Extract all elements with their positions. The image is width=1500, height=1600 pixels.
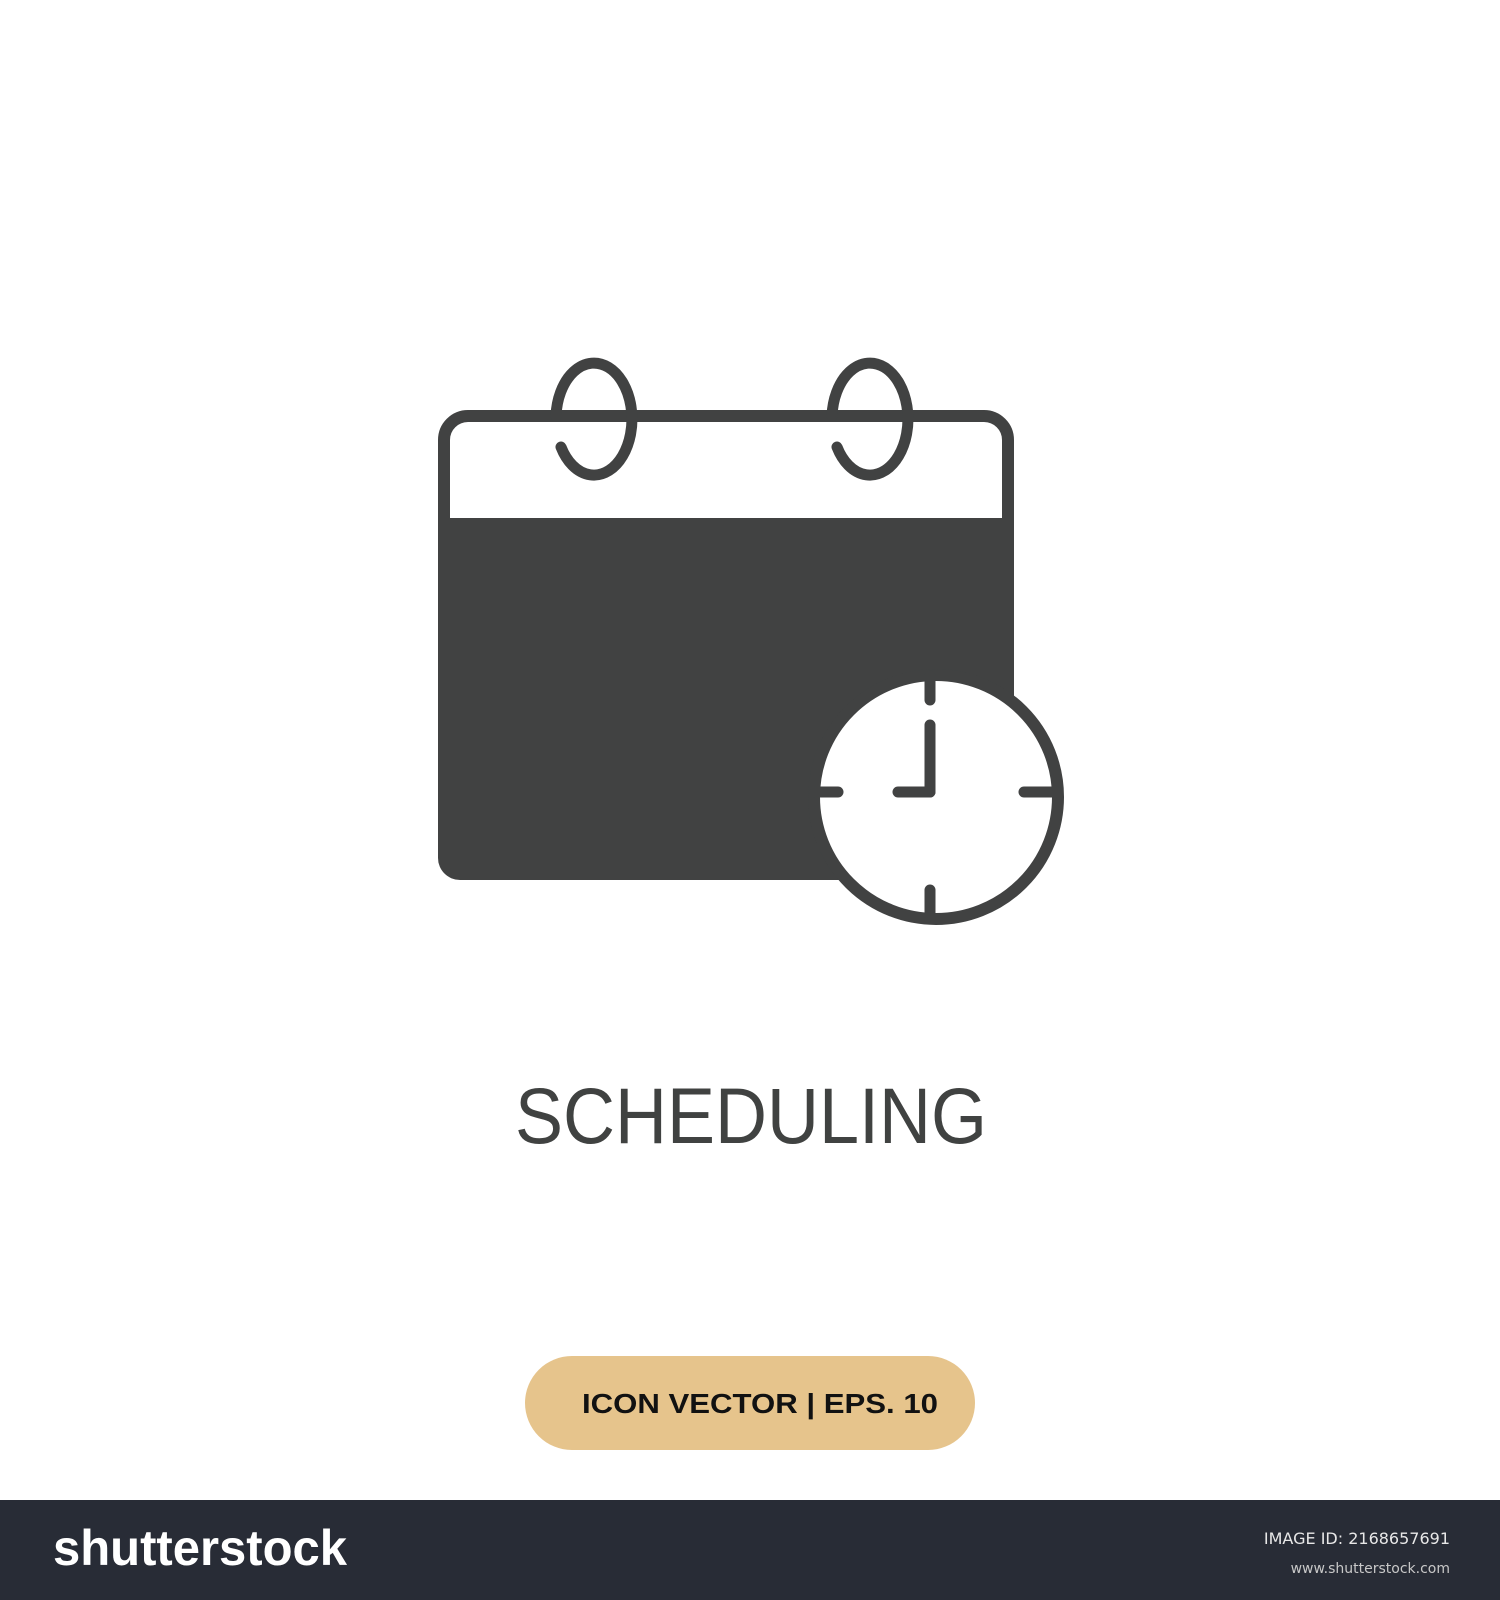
badge: icon vector eps 10: ICON VECTOR | EPS. 10 — [582, 1388, 938, 1419]
calendar header outline — [444, 416, 1008, 520]
footer image id: IMAGE ID: 2168657691 — [1264, 1529, 1450, 1548]
calendar body dark fill — [438, 518, 1014, 880]
calendar ring left — [556, 363, 632, 475]
calendar ring right — [832, 363, 908, 475]
badge: icon vector eps 10 — [525, 1356, 975, 1450]
icon: clock — [814, 675, 1058, 919]
footer logo: shutterstock — [53, 1520, 347, 1576]
title: SCHEDULING: SCHEDULING — [515, 1071, 987, 1160]
icon: calendar — [438, 363, 1014, 880]
footer url: www.shutterstock.com — [1291, 1561, 1450, 1577]
footer bar — [0, 1500, 1500, 1600]
